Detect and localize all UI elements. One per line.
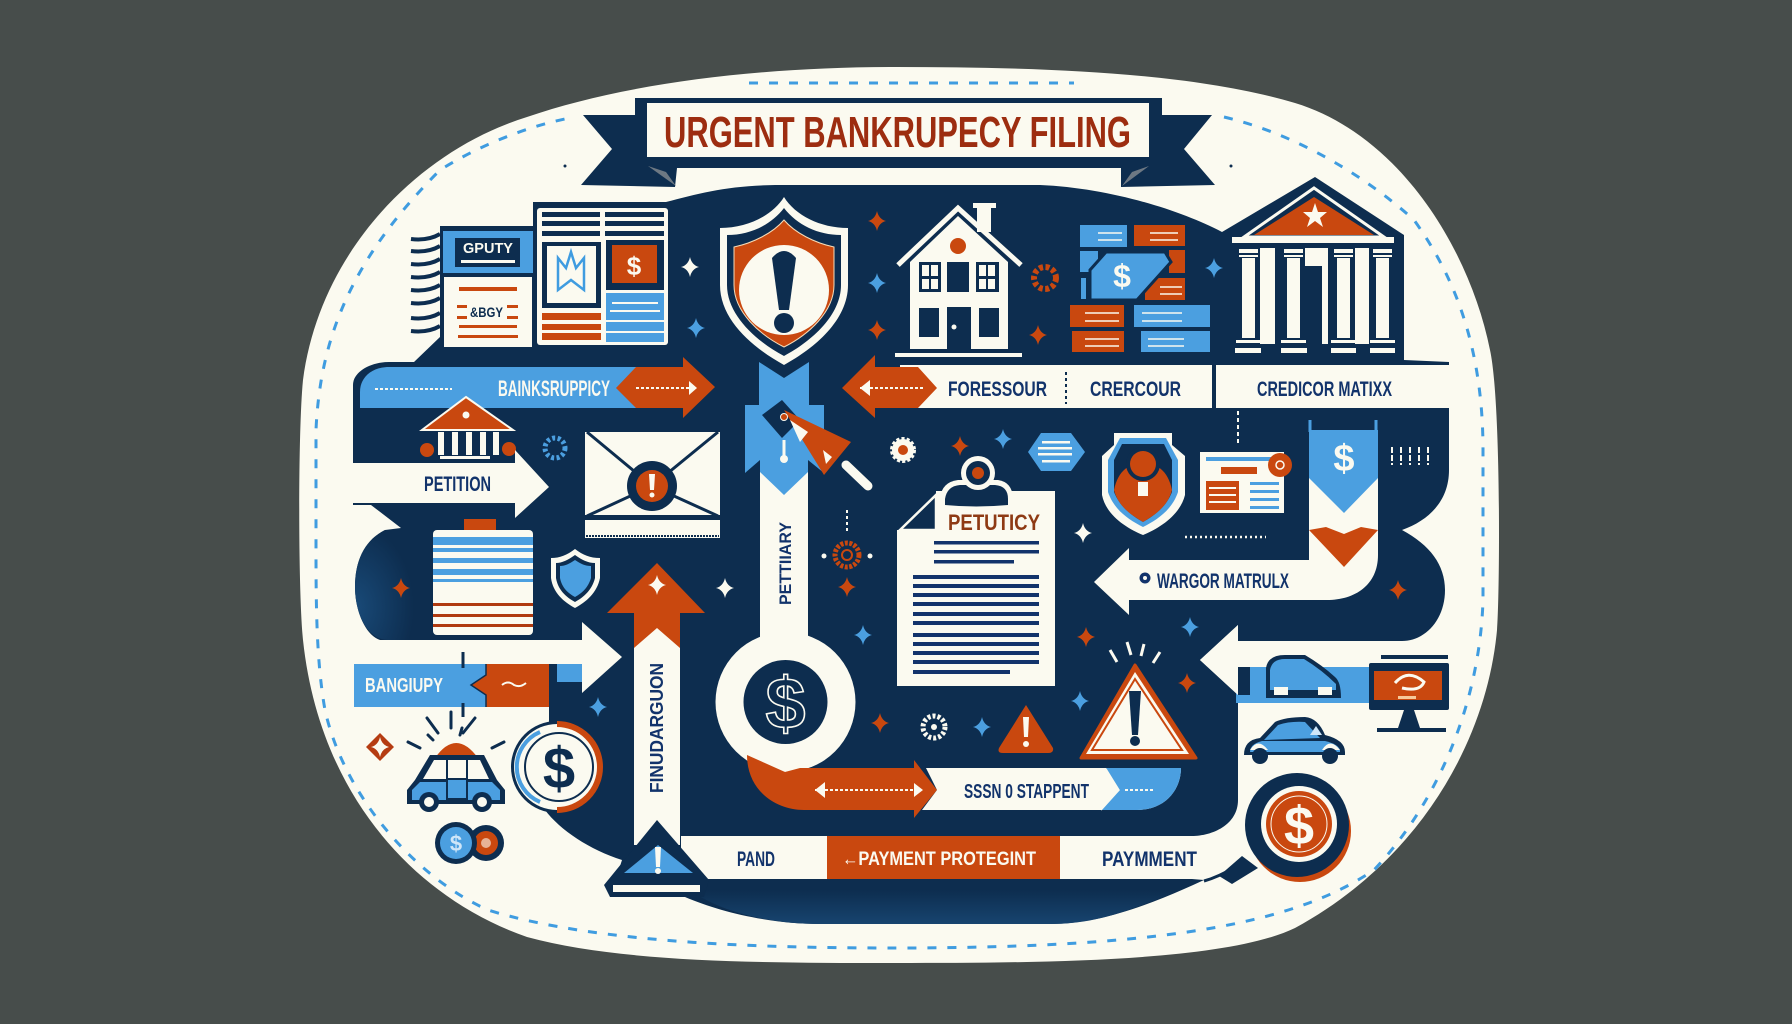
dotted line <box>1185 536 1266 538</box>
icon: sparkle <box>868 273 886 293</box>
ribbon face <box>647 103 1149 157</box>
icon: blue shield <box>551 549 600 608</box>
icon: stacked bills <box>1070 225 1210 352</box>
icon: dollar coin: $ <box>543 736 575 801</box>
label: CREDICOR MATIXX <box>1257 378 1392 401</box>
icon: orange dollar coin with handle <box>1204 773 1351 884</box>
icon: sparkle <box>1029 325 1047 345</box>
bottom band shading <box>690 890 1180 924</box>
icon: card <box>1200 452 1292 513</box>
dot <box>564 164 566 168</box>
label: SSSN 0 STAPPENT <box>964 781 1089 803</box>
orange chevron <box>1309 527 1378 567</box>
icon: orange dollar coin with handle: $ <box>1284 796 1314 856</box>
title ribbon <box>581 98 1215 187</box>
icon: sparkle <box>1181 617 1199 637</box>
cream badge panel <box>299 67 1499 963</box>
navy flow field <box>353 177 1449 924</box>
icon: alert shield <box>720 197 848 365</box>
icon: sparkle <box>1178 673 1196 693</box>
icon: sparkle <box>838 577 856 597</box>
dotted connector <box>1237 411 1239 446</box>
left-pointing cream arrow <box>1200 625 1400 695</box>
petitionary stem with dollar circle: $ <box>765 664 806 744</box>
blue strip <box>1200 625 1369 703</box>
dashed detail <box>375 388 452 390</box>
icon: stacked form document <box>411 231 533 347</box>
icon: warning triangle blue <box>604 820 709 897</box>
icon: envelope alert <box>585 432 720 538</box>
orange double arrow <box>616 357 715 418</box>
icon: sparkle <box>1074 523 1092 543</box>
icon: sparkle <box>871 713 889 733</box>
vertical label: PETTIIARY <box>776 521 795 605</box>
blue bankruptcy bar <box>360 357 715 418</box>
label: PETITION <box>424 473 491 496</box>
bullet <box>1140 572 1150 584</box>
icon: small gear <box>892 439 914 461</box>
bottom payment bar <box>681 836 1204 879</box>
winding arrow: wargor matrix <box>1094 420 1378 615</box>
icon: stacked form document: &BGY <box>470 304 504 320</box>
dashed border <box>316 83 1483 948</box>
icon: house <box>895 203 1022 357</box>
bankruptcy tag <box>354 652 582 717</box>
icon: sparkle <box>687 318 705 338</box>
icon: sparkle <box>1071 691 1089 711</box>
up arrow <box>607 563 705 845</box>
left lobe shading <box>355 530 433 640</box>
petitionary stem with dollar circle <box>716 467 856 772</box>
icon: striped document <box>433 519 533 635</box>
icon: ledger document <box>533 202 668 345</box>
icon: blue hexagon list <box>1028 433 1085 471</box>
label: BANGIUPY <box>365 675 443 697</box>
icon: stacked bills: $ <box>1113 258 1131 294</box>
cream label row <box>900 365 1449 408</box>
icon: sparkle <box>392 578 410 598</box>
icon: sparkle <box>1389 580 1407 600</box>
label: PAYMMENT <box>1102 848 1197 871</box>
icon: sparkle <box>951 436 969 456</box>
orange double arrow <box>842 355 937 418</box>
blue ribbon marker <box>745 362 824 495</box>
icon: blue gear <box>545 438 565 458</box>
label: WARGOR MATRULX <box>1157 570 1289 593</box>
title: URGENT BANKRUPECY FILING <box>664 108 1131 157</box>
dollar pennant <box>1309 430 1378 513</box>
icon: sparkle <box>589 697 607 717</box>
icon: sparkle <box>716 578 734 598</box>
icon: sparkle <box>681 257 699 277</box>
icon: sparkle <box>994 429 1012 449</box>
icon: big warning <box>1081 642 1196 758</box>
icon: alert car <box>407 712 505 812</box>
petition document <box>897 456 1055 686</box>
icon: small coins <box>435 822 504 864</box>
petition arrow <box>353 450 549 518</box>
ribbon folds <box>648 166 1149 186</box>
label: ←PAYMENT PROTEGINT <box>842 849 1036 870</box>
icon: small coins: $ <box>450 831 462 856</box>
clip <box>940 480 1013 508</box>
ribbon left tail <box>581 98 1215 187</box>
icon: small courthouse <box>420 397 516 459</box>
icon: sparkle <box>1205 258 1223 278</box>
icon: person shield <box>1102 433 1185 535</box>
icon: ledger document: $ <box>627 251 642 281</box>
statement arrow <box>922 768 1181 810</box>
icon: sparkle <box>854 625 872 645</box>
icon: top car <box>1266 655 1341 698</box>
icon: orange warning <box>998 705 1053 753</box>
icon: sunburst <box>1034 267 1056 289</box>
icon: sparkle <box>973 717 991 737</box>
icon: gear <box>923 716 945 738</box>
winding arrow: wargor matrix: $ <box>1333 438 1355 480</box>
icon: monitor <box>1369 655 1449 732</box>
text lines <box>913 541 1039 674</box>
right-pointing cream arrow <box>350 622 622 693</box>
label: FORESSOUR <box>948 378 1047 401</box>
label: BAINKSRUPPICY <box>498 376 610 401</box>
label: PAND <box>737 848 775 871</box>
orange curved arrow band <box>747 755 937 818</box>
icon: orange diamond star <box>366 733 394 761</box>
icon: sparkle <box>868 320 886 340</box>
tick marks <box>1392 447 1428 465</box>
wavy edge <box>411 234 440 331</box>
icon: dollar coin <box>511 721 603 813</box>
icon: orange sun <box>822 510 872 567</box>
vertical label: FINUDARGUON <box>647 663 667 793</box>
icon: side car <box>1244 717 1345 764</box>
icon: courthouse <box>1232 188 1395 353</box>
icon: sparkle <box>868 211 886 231</box>
icon: gavel <box>762 400 868 486</box>
icon: sparkle <box>1077 627 1095 647</box>
label: PETUTICY <box>948 510 1040 535</box>
star <box>1303 203 1327 227</box>
label: CRERCOUR <box>1090 378 1181 401</box>
dot <box>1230 164 1232 168</box>
icon: stacked form document: GPUTY <box>463 240 513 257</box>
